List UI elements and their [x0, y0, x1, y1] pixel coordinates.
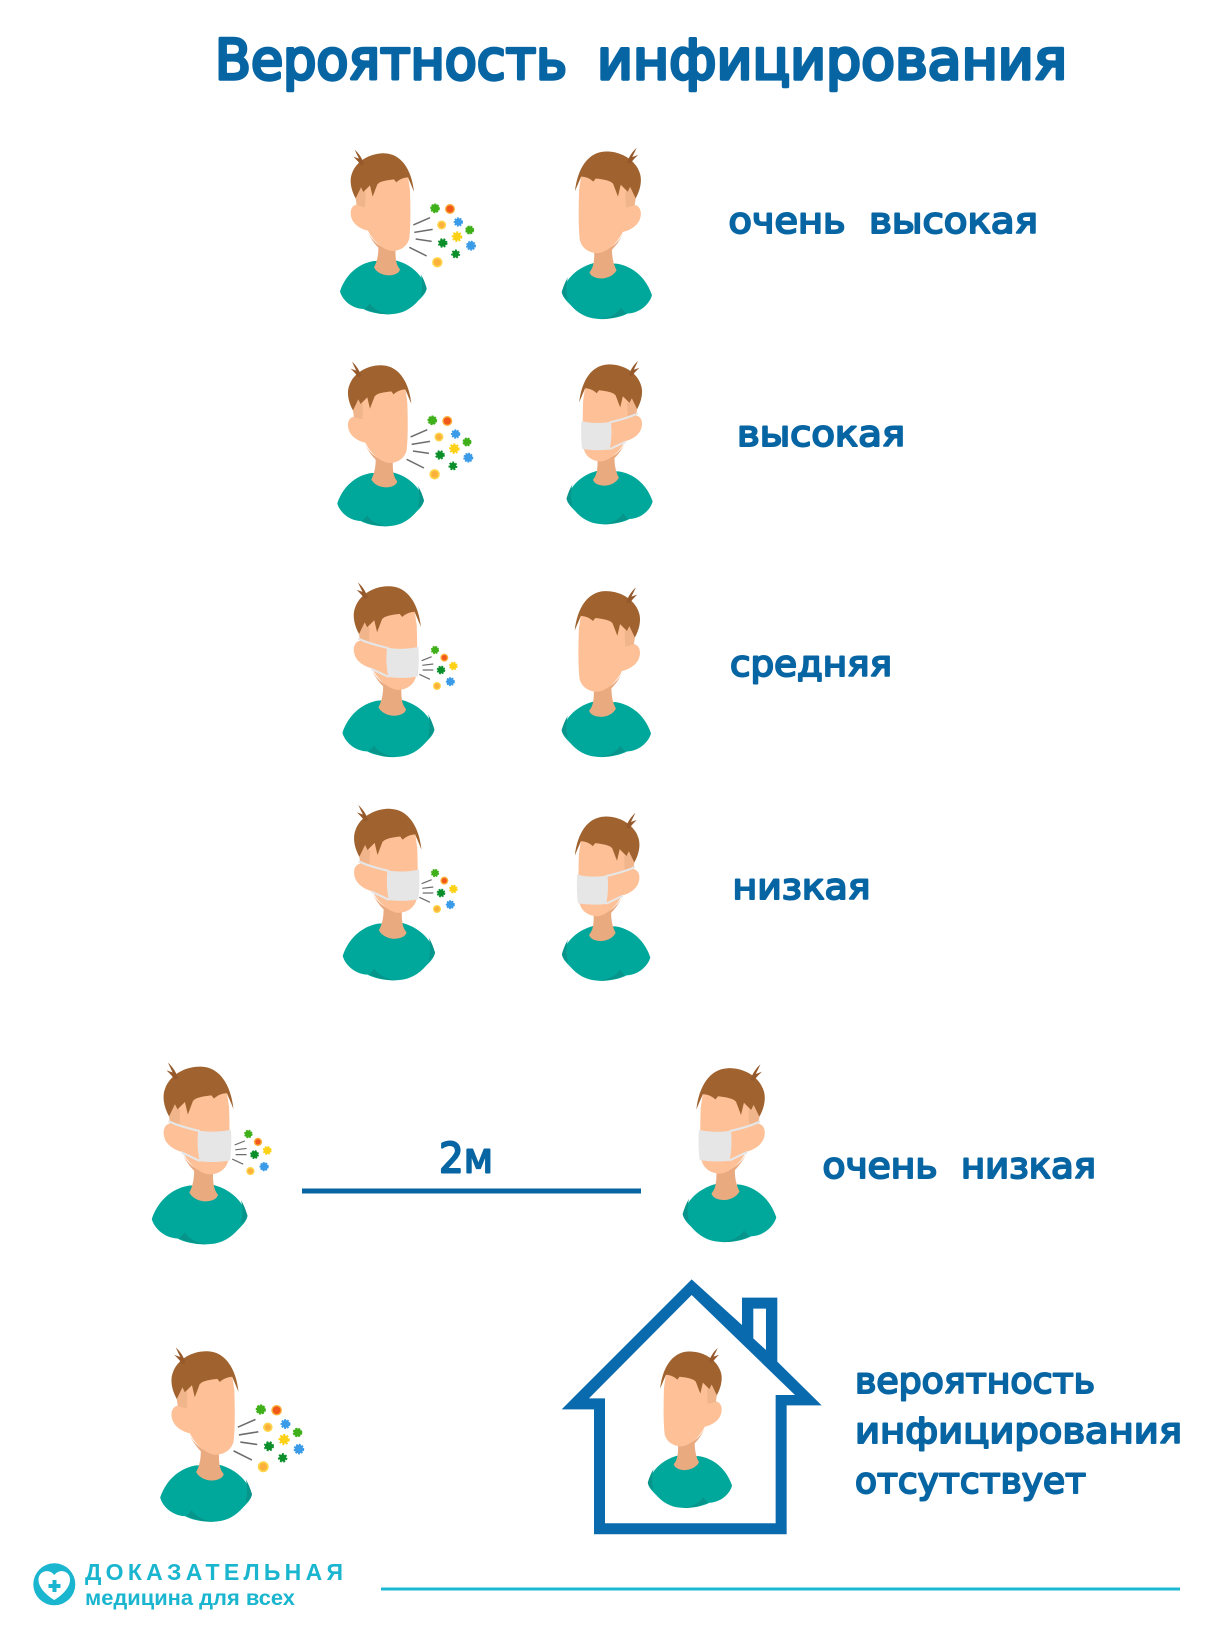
- title: инфицирования: [597, 28, 1067, 92]
- title: [215, 28, 1067, 92]
- label: medium: средняя: [730, 644, 892, 685]
- person coughing, no mask: [337, 362, 472, 526]
- logo text bottom: медицина для всех: [85, 1587, 295, 1610]
- footer line: [381, 1588, 1180, 1590]
- logo text top: ДОКАЗАТЕЛЬНАЯ: [85, 1559, 343, 1585]
- label: low: низкая: [732, 867, 870, 908]
- person wearing mask: [562, 813, 650, 981]
- label: no risk: отсутствует: [855, 1461, 1086, 1502]
- label: very high: [728, 201, 1038, 242]
- icon: house: [562, 1279, 822, 1534]
- row: low risk: [343, 805, 871, 981]
- row: medium risk: [342, 582, 892, 757]
- row: high risk: [337, 361, 905, 526]
- person coughing outside: [160, 1347, 303, 1522]
- person inside house: [648, 1348, 732, 1508]
- person wearing mask: [683, 1064, 776, 1242]
- person, no mask: [562, 148, 652, 319]
- icon: heart with cross: [33, 1563, 75, 1605]
- label: very low: низкая: [961, 1146, 1096, 1187]
- row: very low risk at 2 m: [152, 1063, 1096, 1244]
- person coughing wearing mask: [342, 582, 434, 757]
- small germ cloud: [419, 870, 457, 912]
- row: very high risk: [340, 148, 1038, 319]
- distance line: [302, 1188, 641, 1194]
- label: no risk: [855, 1361, 1182, 1502]
- label: very high: высокая: [869, 201, 1038, 242]
- person coughing wearing mask: [152, 1063, 247, 1244]
- row: no infection risk at home: [160, 1279, 1182, 1534]
- title: Вероятность: [215, 28, 567, 92]
- person, no mask: [562, 587, 651, 757]
- person coughing wearing mask: [343, 805, 435, 980]
- person wearing mask: [567, 361, 653, 524]
- label: no risk: инфицирования: [855, 1411, 1182, 1452]
- label: no risk: вероятность: [855, 1361, 1095, 1402]
- small germ cloud: [419, 647, 457, 689]
- label: very low: очень: [822, 1146, 938, 1187]
- footer logo: [33, 1559, 343, 1610]
- small germ cloud: [232, 1131, 271, 1174]
- distance label: 2м: [439, 1134, 493, 1182]
- person coughing, no mask: [340, 150, 475, 314]
- label: very high: очень: [728, 201, 846, 242]
- label: high: высокая: [737, 414, 905, 455]
- label: very low: [822, 1146, 1096, 1187]
